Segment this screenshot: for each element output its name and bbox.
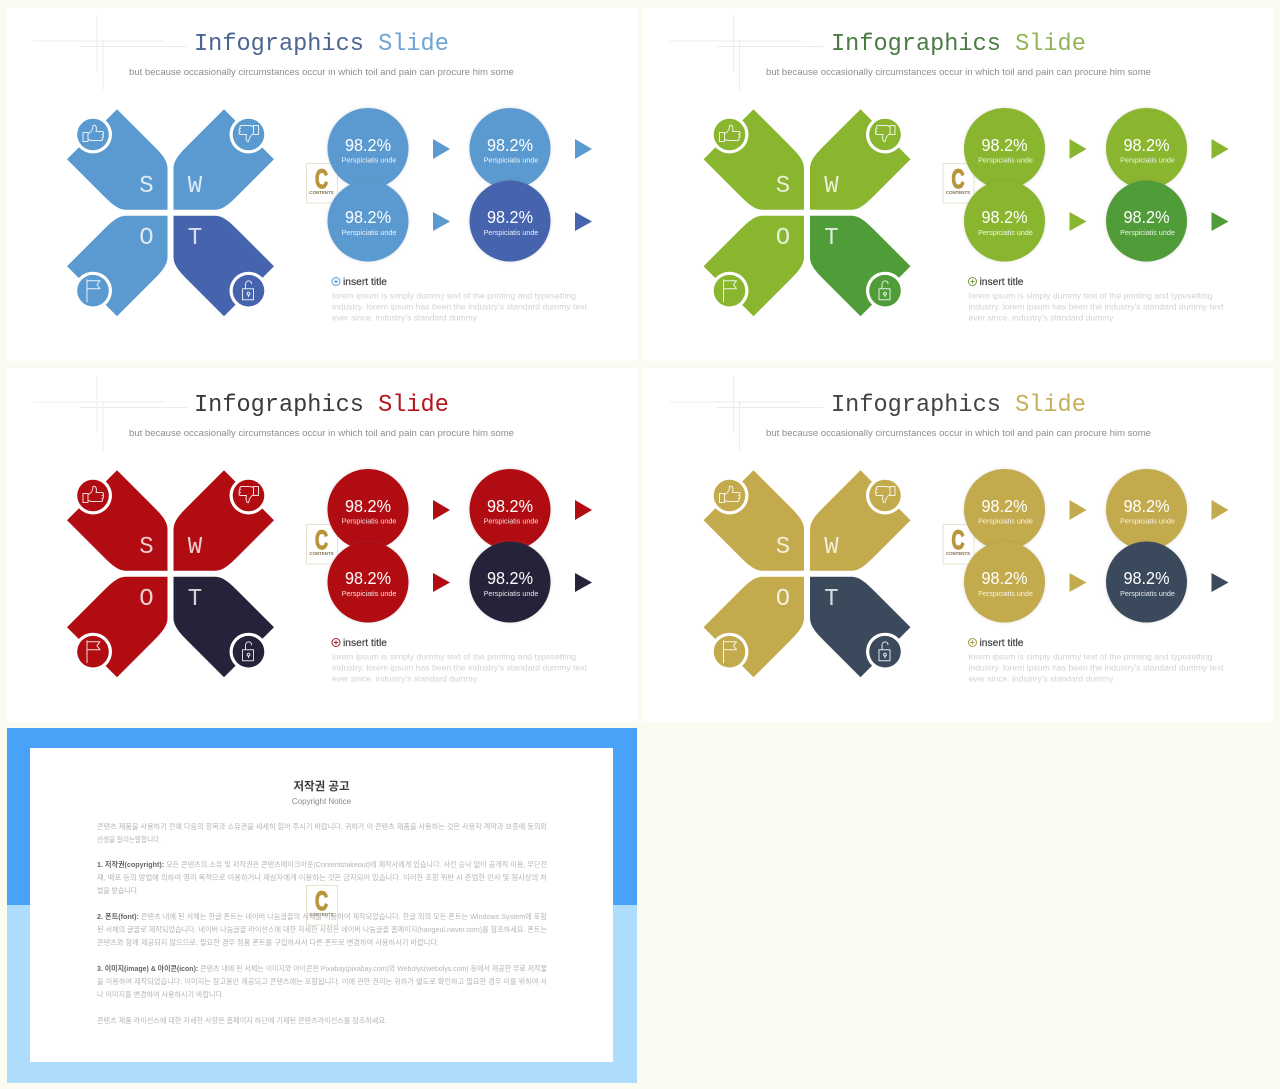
watermark logo: CONTENTS bbox=[309, 551, 334, 556]
stat circle 4 bbox=[470, 180, 550, 262]
stat labels: Perspiciatis unde bbox=[978, 589, 1033, 598]
subtitle: but because occasionally circumstances occur in which toil and pain can procure him some bbox=[766, 428, 1151, 439]
petal S: S bbox=[139, 173, 154, 200]
subtitle: but because occasionally circumstances occur in which toil and pain can procure him some bbox=[129, 428, 514, 439]
panel: light blue frame bottom bbox=[7, 905, 637, 1083]
heading: notice title: 저작권 공고 bbox=[293, 779, 350, 793]
stat labels: 98.2% bbox=[1124, 135, 1170, 155]
petal W: W bbox=[824, 534, 839, 561]
lorem text: ever since. industry's standard dummy bbox=[332, 674, 478, 684]
stat labels: Perspiciatis unde bbox=[1120, 589, 1175, 598]
insert title: insert title bbox=[980, 638, 1024, 649]
notice body text bbox=[97, 822, 547, 1025]
icon: plus bbox=[332, 278, 340, 286]
stat circles bbox=[964, 469, 1187, 622]
stat labels: 98.2% bbox=[982, 135, 1028, 155]
SWOT diagram bbox=[67, 109, 274, 316]
panel: red slide background bbox=[7, 368, 637, 722]
stat circles bbox=[964, 108, 1187, 262]
stat labels: Perspiciatis unde bbox=[978, 228, 1033, 237]
petal T: T bbox=[188, 586, 202, 613]
petal W bbox=[174, 109, 274, 210]
petal T: T bbox=[188, 225, 202, 252]
petal T: T bbox=[824, 225, 839, 252]
stat circles bbox=[328, 108, 550, 262]
petal O bbox=[704, 216, 804, 316]
petal S: S bbox=[139, 534, 154, 561]
lorem text: industry. lorem ipsum has been the industry's standard dummy text bbox=[968, 302, 1224, 312]
stat labels: 98.2% bbox=[345, 135, 391, 155]
petal W: W bbox=[824, 173, 839, 200]
insert title: insert title bbox=[343, 638, 387, 649]
stat circle 2 bbox=[1106, 469, 1187, 550]
stat labels: Perspiciatis unde bbox=[1120, 228, 1175, 237]
text block bbox=[332, 277, 588, 322]
notice body text: 1. 저작권(copyright): 모든 콘텐츠의 소유 및 저작권은 콘텐츠메이크아웃(Contentstakeout)에 제작사에게 있습니다. 사전 승낙 없이 공개적 이용, 무단전 bbox=[97, 860, 547, 869]
watermark logo: C bbox=[315, 525, 328, 555]
notice body text: 2. 폰트(font): 콘텐츠 내에 된 서체는 한글 폰트는 네이버 나눔글꼴의 서체를 이용하여 제작되었습니다. 한글 외의 모든 폰트는 Windows System에 포함 bbox=[97, 912, 547, 921]
stat labels: 98.2% bbox=[345, 496, 391, 516]
petal T bbox=[810, 216, 910, 316]
slide: gold SWOT bbox=[643, 368, 1273, 722]
watermark logo bbox=[943, 524, 974, 564]
subtitle: but because occasionally circumstances occur in which toil and pain can procure him some bbox=[129, 67, 514, 78]
watermark logo: C bbox=[315, 164, 328, 194]
lorem text bbox=[968, 290, 1224, 322]
petal S bbox=[67, 109, 168, 210]
stat circle 3 bbox=[964, 180, 1045, 262]
watermark logo: CONTENTS bbox=[309, 190, 334, 195]
watermark logo: CONTENTS bbox=[946, 551, 970, 556]
stat labels: 98.2% bbox=[1124, 207, 1170, 227]
petal W: W bbox=[188, 173, 203, 200]
stat labels bbox=[978, 135, 1175, 237]
stat labels: Perspiciatis unde bbox=[484, 516, 538, 526]
petal O bbox=[67, 577, 168, 677]
watermark logo bbox=[306, 164, 338, 203]
notice body text: 선생을 알리는말합니다. bbox=[97, 835, 161, 844]
icon: plus bbox=[968, 638, 976, 646]
lorem text: lorem ipsum is simply dummy text of the printing and typesetting bbox=[332, 652, 576, 662]
petal O: O bbox=[139, 586, 154, 613]
notice body text: 콘텐츠 제품을 사용하기 전에 다음의 항목과 소유권을 세세히 읽어 주시기 바랍니다. 귀하가 이 콘텐츠 제품을 사용하는 것은 사용자 계약과 보증에 동의와 bbox=[97, 822, 547, 831]
panel: white notice sheet bbox=[30, 748, 613, 1062]
arrows bbox=[1070, 139, 1228, 231]
slide: red SWOT bbox=[7, 368, 637, 722]
text block bbox=[968, 638, 1224, 684]
petal W: W bbox=[188, 534, 203, 561]
lorem text bbox=[332, 652, 588, 684]
lorem text bbox=[332, 290, 588, 322]
watermark logo: C bbox=[952, 164, 964, 194]
slide: blue SWOT bbox=[7, 8, 637, 361]
stat labels: Perspiciatis unde bbox=[484, 156, 538, 164]
stat labels: Perspiciatis unde bbox=[342, 228, 396, 237]
icon: plus bbox=[332, 638, 340, 646]
stat circle 4 bbox=[470, 542, 550, 622]
lorem text: industry. lorem ipsum has been the industry's standard dummy text bbox=[968, 662, 1224, 672]
stat labels: 98.2% bbox=[1124, 568, 1170, 588]
lorem text bbox=[968, 652, 1224, 684]
insert title: insert title bbox=[343, 277, 387, 288]
notice body text: 된 서체의 글꼴로 제작되었습니다. 네이버 나눔글꼴 라이선스에 대한 자세한 사항은 네이버 나눔글꼴 홈페이지(hangeul.naver.com)를 참조하세요. 폰트는 bbox=[97, 925, 547, 934]
petal T: T bbox=[824, 586, 839, 613]
text block bbox=[332, 638, 588, 684]
watermark logo: CONTENTS bbox=[309, 912, 334, 917]
SWOT diagram bbox=[67, 470, 274, 677]
petal S bbox=[704, 109, 804, 210]
stat labels: Perspiciatis unde bbox=[978, 156, 1033, 164]
stat circle 3 bbox=[328, 542, 408, 622]
panel: green slide background bbox=[643, 8, 1273, 361]
stat labels: Perspiciatis unde bbox=[978, 516, 1033, 526]
notice body text: 벌을 받습니다. bbox=[97, 886, 139, 895]
stat labels: 98.2% bbox=[487, 568, 533, 588]
lorem text: industry. lorem ipsum has been the industry's standard dummy text bbox=[332, 302, 588, 312]
stat labels: 98.2% bbox=[345, 568, 391, 588]
stat labels bbox=[342, 135, 538, 237]
stat circle 1 bbox=[328, 108, 408, 189]
lorem text: ever since. industry's standard dummy bbox=[968, 674, 1114, 684]
stat labels: Perspiciatis unde bbox=[1120, 516, 1175, 526]
stat labels: Perspiciatis unde bbox=[342, 156, 396, 164]
stat circle 2 bbox=[1106, 108, 1187, 189]
arrows bbox=[433, 139, 592, 231]
stat labels: 98.2% bbox=[345, 207, 391, 227]
petal S: S bbox=[776, 173, 790, 200]
text block bbox=[968, 277, 1224, 322]
petal T bbox=[810, 577, 910, 677]
stat labels: 98.2% bbox=[487, 207, 533, 227]
petal O bbox=[67, 216, 168, 316]
stat labels: Perspiciatis unde bbox=[1120, 156, 1175, 164]
notice body text: 재, 배포 등의 방법에 의하여 영리 목적으로 이용하거나 제삼자에게 이용하는 것은 금지되어 있습니다. 이러한 조항 위반 시 준엄한 민사 및 형사상의 처 bbox=[97, 873, 547, 882]
stat labels: Perspiciatis unde bbox=[342, 516, 396, 526]
petal S: S bbox=[776, 534, 790, 561]
stat circle 1 bbox=[328, 469, 408, 550]
stat labels: 98.2% bbox=[982, 568, 1028, 588]
petal W bbox=[810, 109, 910, 210]
watermark logo bbox=[943, 164, 974, 203]
petal T bbox=[174, 577, 274, 677]
SWOT diagram bbox=[704, 470, 910, 677]
petal O: O bbox=[776, 225, 790, 252]
petal T bbox=[174, 216, 274, 316]
notice body text: 콘텐츠와 함께 제공되지 않으므로, 필요한 경우 정품 폰트를 구입하셔서 다른 폰트로 변경하여 사용하시기 바랍니다. bbox=[97, 938, 439, 947]
watermark logo bbox=[306, 886, 338, 925]
petal S bbox=[67, 470, 168, 571]
panel: blue slide background bbox=[7, 8, 637, 361]
lorem text: ever since. industry's standard dummy bbox=[332, 312, 478, 322]
slide: copyright notice bbox=[7, 728, 637, 1083]
notice body text: 을 이용하여 제작되었습니다. 이미지는 참고용만 제공되고 콘텐츠에는 포함됩니다. 이에 관한 권리는 귀하가 별도로 확인하고 필요한 경우 이를 위하여 서 bbox=[97, 977, 547, 986]
watermark logo bbox=[306, 524, 338, 564]
stat labels: Perspiciatis unde bbox=[484, 589, 538, 598]
stat circle 2 bbox=[470, 108, 550, 189]
icon: plus bbox=[968, 278, 976, 286]
stat labels: 98.2% bbox=[1124, 496, 1170, 516]
stat circles bbox=[328, 469, 550, 622]
petal O: O bbox=[776, 586, 790, 613]
stat labels: 98.2% bbox=[982, 207, 1028, 227]
SWOT diagram bbox=[704, 109, 910, 316]
lorem text: industry. lorem ipsum has been the industry's standard dummy text bbox=[332, 662, 588, 672]
notice body text: 콘텐츠 제품 라이선스에 대한 자세한 사항은 홈페이지 하단에 기재된 콘텐츠라이선스를 참조하세요. bbox=[97, 1016, 387, 1025]
petal O: O bbox=[139, 225, 154, 252]
stat circle 4 bbox=[1106, 180, 1187, 262]
lorem text: lorem ipsum is simply dummy text of the printing and typesetting bbox=[968, 652, 1213, 662]
subtitle: but because occasionally circumstances occur in which toil and pain can procure him some bbox=[766, 67, 1151, 78]
petal S bbox=[704, 470, 804, 571]
stat labels bbox=[342, 496, 538, 598]
lorem text: lorem ipsum is simply dummy text of the printing and typesetting bbox=[332, 290, 576, 300]
notice body text: 나 이미지를 변경하여 사용하시기 바랍니다. bbox=[97, 990, 224, 999]
stat labels: Perspiciatis unde bbox=[484, 228, 538, 237]
petal W bbox=[174, 470, 274, 571]
insert title: insert title bbox=[980, 277, 1024, 288]
stat circle 3 bbox=[328, 180, 408, 262]
stat circle 1 bbox=[964, 469, 1045, 550]
title: blue slide: Infographics Slide bbox=[194, 31, 449, 58]
watermark logo: CONTENTS bbox=[946, 190, 970, 195]
notice body text: 3. 이미지(image) & 아이콘(icon): 콘텐츠 내에 된 서체는 이미지와 아이콘은 Pixabay(pixabay.com)와 Webolys(webolys.com) 등에서 제공한 무료 저작물 bbox=[97, 964, 547, 973]
watermark logo: C bbox=[315, 886, 328, 916]
stat labels: 98.2% bbox=[487, 135, 533, 155]
stat circle 1 bbox=[964, 108, 1045, 189]
lorem text: lorem ipsum is simply dummy text of the printing and typesetting bbox=[968, 290, 1213, 300]
watermark logo: C bbox=[952, 525, 964, 555]
stat labels: Perspiciatis unde bbox=[342, 589, 396, 598]
stat circle 3 bbox=[964, 542, 1045, 622]
arrows bbox=[433, 500, 592, 592]
stat labels: 98.2% bbox=[487, 496, 533, 516]
panel: gold slide background bbox=[643, 368, 1273, 722]
slide: green SWOT bbox=[643, 8, 1273, 361]
petal W bbox=[810, 470, 910, 571]
panel: blue frame top bbox=[7, 728, 637, 905]
stat labels bbox=[978, 496, 1175, 598]
petal O bbox=[704, 577, 804, 677]
stat circle 2 bbox=[470, 469, 550, 550]
stat labels: 98.2% bbox=[982, 496, 1028, 516]
title: red slide: Infographics Slide bbox=[194, 392, 449, 419]
title: green slide: Infographics Slide bbox=[831, 31, 1086, 58]
stat circle 4 bbox=[1106, 542, 1187, 622]
subheading: copyright notice: Copyright Notice bbox=[292, 797, 352, 806]
lorem text: ever since. industry's standard dummy bbox=[968, 312, 1114, 322]
arrows bbox=[1070, 500, 1228, 592]
title: gold slide: Infographics Slide bbox=[831, 392, 1086, 419]
